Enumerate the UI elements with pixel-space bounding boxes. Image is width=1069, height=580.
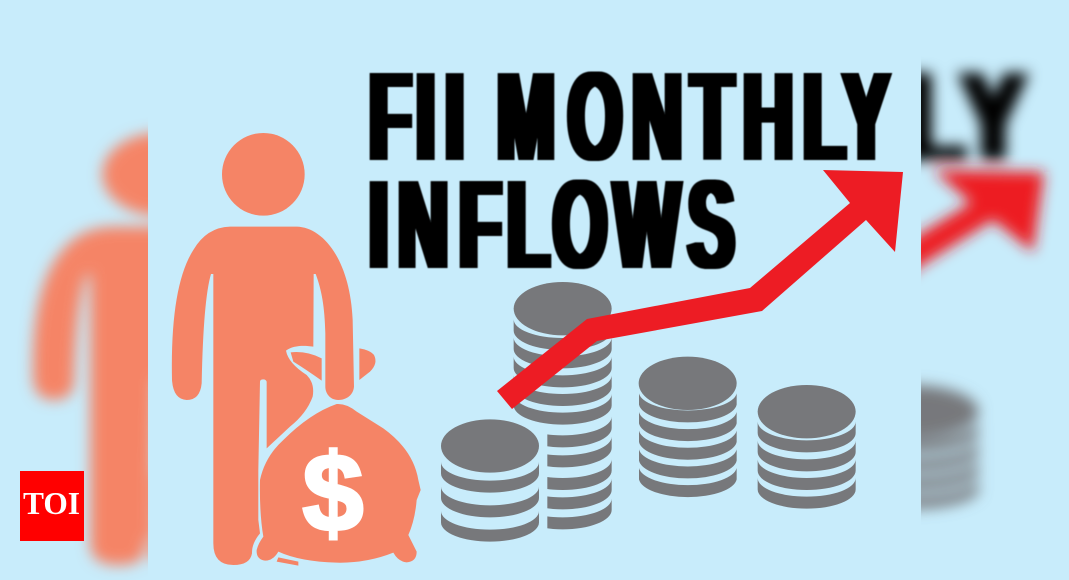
arrow: rising red trend — [497, 170, 903, 409]
dollar sign: $ — [302, 432, 364, 555]
icon: money bag — [257, 348, 421, 566]
title line 1: FII MONTHLY — [369, 46, 889, 187]
coin stack 1 — [441, 419, 539, 542]
logo background — [20, 471, 84, 541]
logo text: TOI — [23, 485, 80, 521]
coin stack 4 — [758, 385, 856, 509]
central panel — [148, 0, 921, 580]
logo: TOI — [20, 471, 84, 541]
bag scrap — [277, 557, 298, 566]
title — [369, 46, 889, 295]
coin stacks — [441, 282, 856, 542]
coin stack 3 — [639, 357, 737, 497]
title line 2: INFLOWS — [369, 154, 734, 295]
body — [172, 227, 354, 565]
head — [222, 133, 305, 216]
figure: person — [172, 133, 354, 565]
bag knot right — [359, 348, 375, 380]
coin stack 2 tall — [514, 282, 612, 529]
bag body — [257, 404, 421, 563]
bag knot left — [291, 352, 322, 381]
